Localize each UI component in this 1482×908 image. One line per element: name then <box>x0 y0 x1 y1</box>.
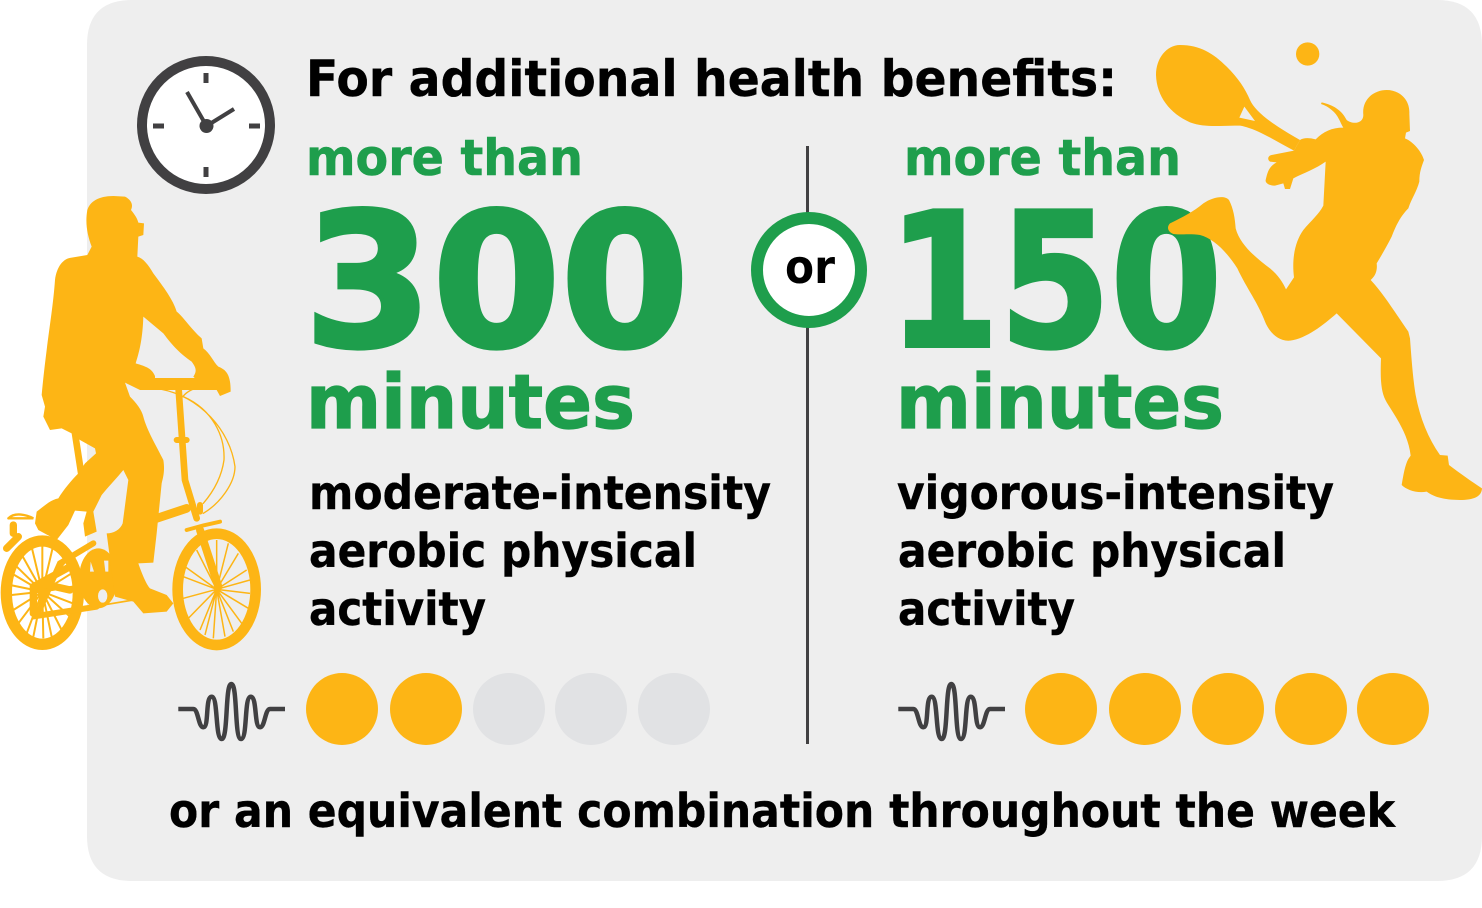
description: moderate-intensity <box>309 466 771 520</box>
front wheel <box>178 534 256 645</box>
label: minutes: minutes <box>896 358 1224 446</box>
rider silhouette <box>35 196 231 613</box>
label: minutes: minutes <box>306 358 635 446</box>
chainring <box>79 548 118 608</box>
description: vigorous-intensity <box>897 466 1334 520</box>
number: 150: 150 <box>888 173 1222 390</box>
icon: pulse wave <box>898 684 1005 739</box>
illustration: tennis player <box>1156 42 1482 500</box>
badge: or: or <box>785 240 835 294</box>
label: more than: more than <box>306 129 583 187</box>
intensity dots: 5 of 5 <box>1025 673 1429 745</box>
description <box>309 466 771 636</box>
icon: clock <box>142 61 270 189</box>
description: activity <box>309 582 486 636</box>
column: moderate intensity <box>178 129 771 745</box>
tennis ball <box>1296 42 1319 66</box>
column: vigorous intensity <box>888 129 1429 745</box>
description: aerobic physical <box>309 524 697 578</box>
number: 300: 300 <box>304 173 689 390</box>
intensity dots: 2 of 5 <box>306 673 710 745</box>
illustration: cyclist on folding bike <box>6 196 256 645</box>
divider line <box>806 146 809 744</box>
description: activity <box>898 582 1075 636</box>
description <box>897 466 1334 636</box>
racket <box>1156 45 1300 151</box>
heading: For additional health benefits: <box>306 50 1117 108</box>
icon: pulse wave <box>178 684 285 739</box>
rear wheel <box>6 540 78 644</box>
badge: or <box>757 218 861 322</box>
player silhouette <box>1168 90 1482 500</box>
footer text: or an equivalent combination throughout the week <box>169 784 1396 838</box>
description: aerobic physical <box>898 524 1286 578</box>
bike frame <box>7 384 235 616</box>
label: more than: more than <box>904 129 1181 187</box>
